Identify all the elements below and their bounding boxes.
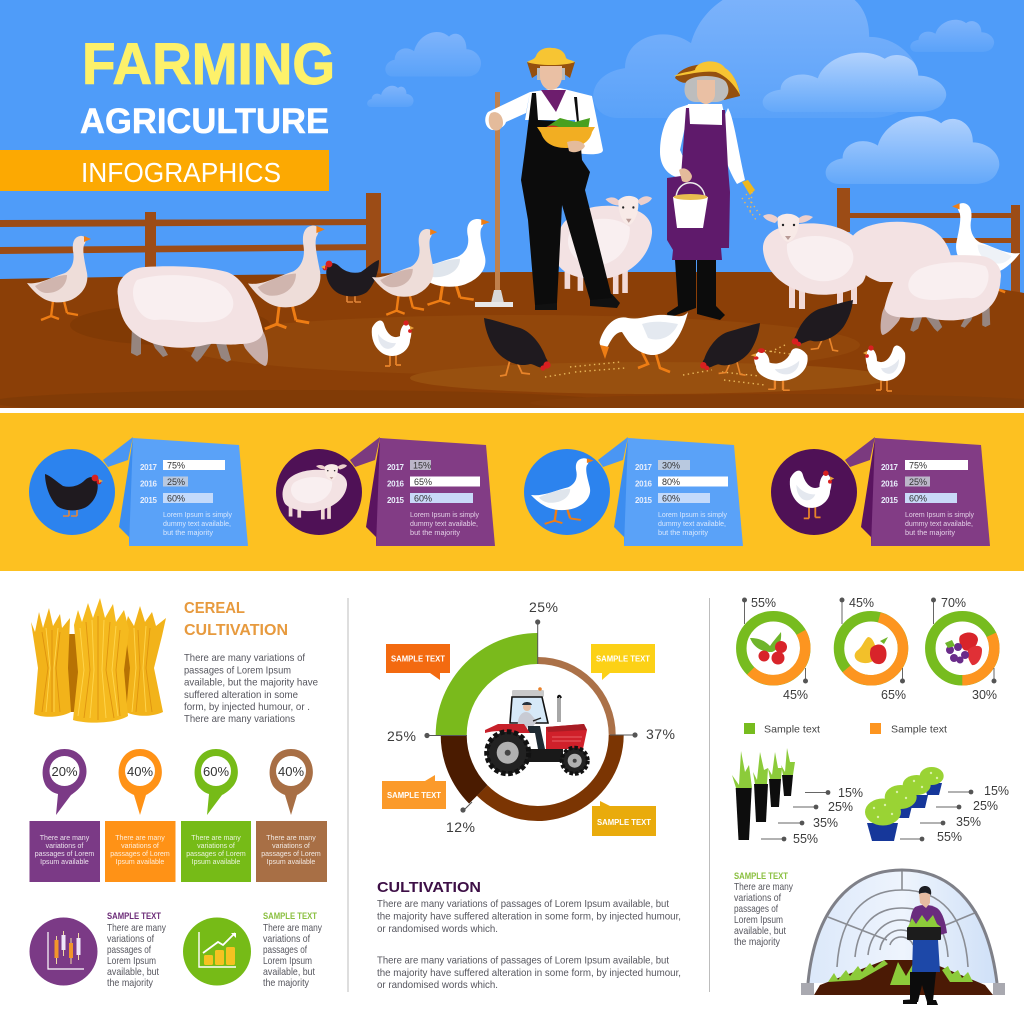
speech panel: 25% — [909, 477, 927, 487]
heading: cereal cultivation: CULTIVATION — [184, 622, 288, 639]
donut chart: 25% — [387, 728, 416, 744]
text: green sample: Lorem Ipsum — [263, 956, 312, 967]
donut: berries — [930, 596, 997, 702]
banner: infographics — [0, 150, 329, 191]
white goose feeding — [600, 312, 688, 372]
icon: growth chart with coins — [183, 918, 251, 986]
speech panel: 2016 — [140, 480, 158, 488]
text: green sample: the majority — [263, 978, 310, 989]
panel: cultivation — [377, 599, 681, 991]
box: brown: passages of Lorem — [261, 851, 321, 858]
text: green sample: variations of — [263, 934, 310, 945]
icon: goose — [524, 449, 610, 535]
goose, centre — [372, 229, 437, 315]
legend: Sample text — [764, 724, 820, 736]
pin: 20%: 20% — [51, 764, 78, 779]
pin: 60%: 60% — [203, 764, 229, 779]
donut: pear and apple: 45% — [849, 596, 874, 610]
speech panel: 2015 — [387, 496, 405, 505]
text: greenhouse sample: Lorem Ipsum — [734, 915, 783, 926]
icon: black hen — [29, 449, 115, 535]
feed bucket — [673, 183, 708, 228]
box: green: variations of — [197, 843, 235, 850]
speech panel: 2017 — [387, 463, 405, 472]
speech panel: 25% — [167, 477, 185, 487]
speech panel: but the majority — [658, 530, 709, 537]
heading: cereal cultivation: CEREAL — [184, 600, 245, 617]
legend — [744, 723, 947, 736]
speech panel: 60% — [414, 494, 432, 504]
speech panel: 30% — [662, 460, 680, 470]
speech panel: Lorem Ipsum is simply — [658, 512, 727, 519]
callout: yellow — [591, 644, 655, 680]
black hen standing — [321, 260, 379, 302]
leaders: bush percentages: 25% — [973, 799, 998, 813]
legend: Sample text — [891, 724, 947, 736]
speech panel: 60% — [909, 494, 927, 504]
pin: 60% — [195, 749, 238, 815]
callout: gold: SAMPLE TEXT — [597, 818, 651, 827]
farmyard ground — [0, 272, 1024, 414]
box: orange: passages of Lorem — [110, 851, 170, 858]
callout: red-orange — [386, 644, 450, 680]
white hens, right — [751, 345, 905, 391]
callout: yellow: SAMPLE TEXT — [596, 654, 650, 664]
heading: cultivation: CULTIVATION — [377, 879, 481, 896]
donut: berries: 30% — [972, 688, 997, 702]
speech panel: 75% — [167, 460, 185, 470]
text block: the majority have suffered alteration in some form, by injected humour, — [377, 912, 681, 922]
box: green: There are many — [191, 835, 241, 842]
right fence — [837, 188, 1020, 293]
icon: potted grass — [732, 748, 795, 840]
box: brown: variations of — [272, 843, 310, 850]
speech panel: 15% — [413, 460, 431, 470]
grazing sheep, right — [881, 255, 1001, 335]
text: green sample — [263, 911, 323, 989]
pin: 40%: 40% — [127, 764, 153, 779]
speech panel: 2017 — [635, 463, 653, 472]
donut: pear and apple — [839, 596, 906, 702]
box: brown — [256, 821, 327, 882]
heading: farming: FARMING — [82, 32, 335, 97]
text: green sample: There are many — [263, 923, 323, 934]
gardener with tray — [903, 886, 947, 1005]
left fence — [0, 193, 381, 277]
scattered feed — [545, 192, 790, 385]
text: greenhouse sample: passages of — [734, 904, 778, 915]
speech panel: 2015 — [881, 496, 899, 505]
speech panel: Lorem Ipsum is simply — [905, 512, 974, 519]
speech panel: 80% — [662, 477, 680, 487]
sky clouds — [367, 0, 999, 184]
leaders: grass percentages: 25% — [828, 800, 853, 814]
box: green: passages of Lorem — [186, 851, 246, 858]
speech panel: Lorem Ipsum is simply — [410, 512, 479, 519]
speech panel: 2017 — [881, 463, 899, 472]
text: purple sample: the majority — [107, 978, 154, 989]
text: purple sample: SAMPLE TEXT — [107, 911, 161, 922]
stat card: white hen — [771, 437, 990, 546]
text block: passages of Lorem Ipsum — [184, 666, 291, 676]
speech panel: but the majority — [163, 530, 214, 537]
hero scene panel — [0, 0, 1024, 414]
text block: or randomised words which. — [377, 924, 498, 935]
pin: 40% brown — [270, 749, 313, 815]
speech panel: 2015 — [140, 496, 158, 505]
panel: cereal cultivation — [30, 598, 327, 989]
text block: or randomised words which. — [377, 980, 498, 991]
text block — [184, 653, 318, 725]
text: purple sample: There are many — [107, 923, 167, 934]
white hen, left — [372, 320, 414, 366]
speech panel: 75% — [909, 460, 927, 470]
speech panel — [598, 437, 743, 546]
heading: cereal cultivation — [184, 600, 288, 639]
box: purple: passages of Lorem — [35, 851, 94, 858]
speech panel — [350, 437, 495, 546]
box: purple: Ipsum available — [40, 859, 89, 866]
donut chart — [387, 599, 675, 835]
text: greenhouse sample: variations of — [734, 893, 781, 904]
icon: potted bushes — [865, 767, 944, 841]
banner: infographics: INFOGRAPHICS — [81, 157, 281, 188]
white goose, right — [952, 203, 1020, 292]
text block: available, but the majority have — [184, 678, 318, 688]
speech panel: 2016 — [635, 480, 653, 488]
text: purple sample: Lorem Ipsum — [107, 956, 156, 967]
text: greenhouse sample: available, but — [734, 926, 786, 937]
rake — [475, 92, 513, 307]
black hens pecking — [484, 300, 853, 376]
speech panel: 60% — [662, 494, 680, 504]
speech panel: dummy text available, — [658, 521, 726, 528]
sheep behind farmer — [555, 196, 652, 294]
pin: 40% — [119, 749, 162, 815]
donut: vegetables: 55% — [751, 596, 776, 610]
text: green sample: available, but — [263, 967, 315, 978]
standing sheep, right — [763, 214, 867, 309]
heading: agriculture: AGRICULTURE — [80, 102, 329, 141]
donut: pear and apple: 65% — [881, 688, 906, 702]
speech panel: dummy text available, — [905, 521, 973, 528]
text: purple sample — [107, 911, 167, 989]
box: purple: variations of — [46, 843, 83, 850]
text: greenhouse sample: There are many — [734, 882, 794, 893]
text: purple sample: variations of — [107, 934, 154, 945]
text: greenhouse sample: the majority — [734, 937, 781, 948]
pin: 20% — [43, 749, 87, 815]
pin: 40% brown: 40% — [278, 764, 304, 779]
callout: gold — [592, 801, 656, 836]
female farmer — [660, 61, 755, 320]
box: brown: There are many — [266, 835, 316, 842]
speech panel: but the majority — [410, 530, 461, 537]
leaders: grass percentages: 35% — [813, 816, 838, 830]
box: purple — [30, 821, 100, 882]
callout: red-orange: SAMPLE TEXT — [391, 654, 445, 664]
speech panel: 60% — [167, 494, 185, 504]
icon: white hen — [771, 449, 857, 535]
leaders: grass percentages: 15% — [838, 786, 863, 800]
text: greenhouse sample: SAMPLE TEXT — [734, 871, 788, 882]
male farmer — [485, 48, 620, 310]
text: greenhouse sample — [734, 871, 794, 948]
icon: candlestick chart — [30, 918, 98, 986]
box: orange — [105, 821, 176, 882]
white goose — [427, 219, 490, 306]
speech panel: but the majority — [905, 530, 956, 537]
icon: tractor — [485, 687, 588, 774]
text block: There are many variations of passages of Lorem Ipsum available, but — [377, 899, 669, 910]
text block — [377, 899, 681, 991]
text block: suffered alteration in some — [184, 690, 298, 701]
stat card: goose — [524, 437, 743, 546]
text: green sample: passages of — [263, 945, 307, 956]
text block: form, by injected humour, or . — [184, 702, 310, 713]
text block: the majority have suffered alteration in some form, by injected humour, — [377, 968, 681, 979]
speech panel: 2016 — [881, 480, 899, 488]
speech panel: 2015 — [635, 496, 653, 505]
speech panel: dummy text available, — [410, 521, 478, 528]
back sheep, right — [850, 222, 952, 282]
text: purple sample: passages of — [107, 945, 151, 956]
donut chart: 37% — [646, 726, 675, 742]
stat card: sheep — [276, 437, 495, 546]
grazing sheep, left — [118, 266, 268, 366]
donut chart: 25% — [529, 599, 558, 615]
box: purple: There are many — [40, 835, 90, 842]
speech panel: 2017 — [140, 463, 158, 472]
donut chart: 12% — [446, 819, 475, 835]
greenhouse — [801, 870, 1005, 1005]
donut: berries: 70% — [941, 596, 966, 610]
icon: wheat sheaves — [31, 598, 166, 723]
speech panel: 65% — [414, 477, 432, 487]
leaders: bush percentages: 55% — [937, 830, 962, 844]
goose, far left — [27, 236, 91, 320]
yellow statistics band — [0, 413, 1024, 571]
box: orange: Ipsum available — [116, 859, 164, 866]
icon: sheep — [276, 449, 362, 535]
panel: produce and greenhouse — [732, 596, 1009, 1005]
leaders: bush percentages — [900, 784, 1009, 844]
leaders: grass percentages: 55% — [793, 832, 818, 846]
box: orange: There are many — [115, 835, 165, 842]
leaders: bush percentages: 15% — [984, 784, 1009, 798]
speech panel — [845, 437, 990, 546]
goose, beside sheep — [248, 226, 325, 329]
text: green sample: SAMPLE TEXT — [263, 911, 317, 922]
title — [0, 32, 335, 191]
stat card: black hen — [29, 437, 248, 546]
leaders: bush percentages: 35% — [956, 815, 981, 829]
donut: vegetables — [741, 596, 808, 702]
donut: vegetables: 45% — [783, 688, 808, 702]
speech panel: Lorem Ipsum is simply — [163, 512, 232, 519]
callout: orange: SAMPLE TEXT — [387, 791, 441, 800]
speech panel: 2016 — [387, 480, 405, 488]
box: orange: variations of — [121, 843, 159, 850]
box: green — [181, 821, 251, 882]
text block: There are many variations of — [184, 653, 305, 664]
callout: orange — [382, 775, 446, 809]
box: brown: Ipsum available — [267, 859, 315, 866]
speech panel: dummy text available, — [163, 521, 231, 528]
speech panel — [103, 437, 248, 546]
box: green: Ipsum available — [192, 859, 240, 866]
leaders: grass percentages — [761, 786, 863, 846]
text block: There are many variations — [184, 714, 295, 725]
text: purple sample: available, but — [107, 967, 159, 978]
text block: There are many variations of passages of Lorem Ipsum available, but — [377, 956, 669, 966]
